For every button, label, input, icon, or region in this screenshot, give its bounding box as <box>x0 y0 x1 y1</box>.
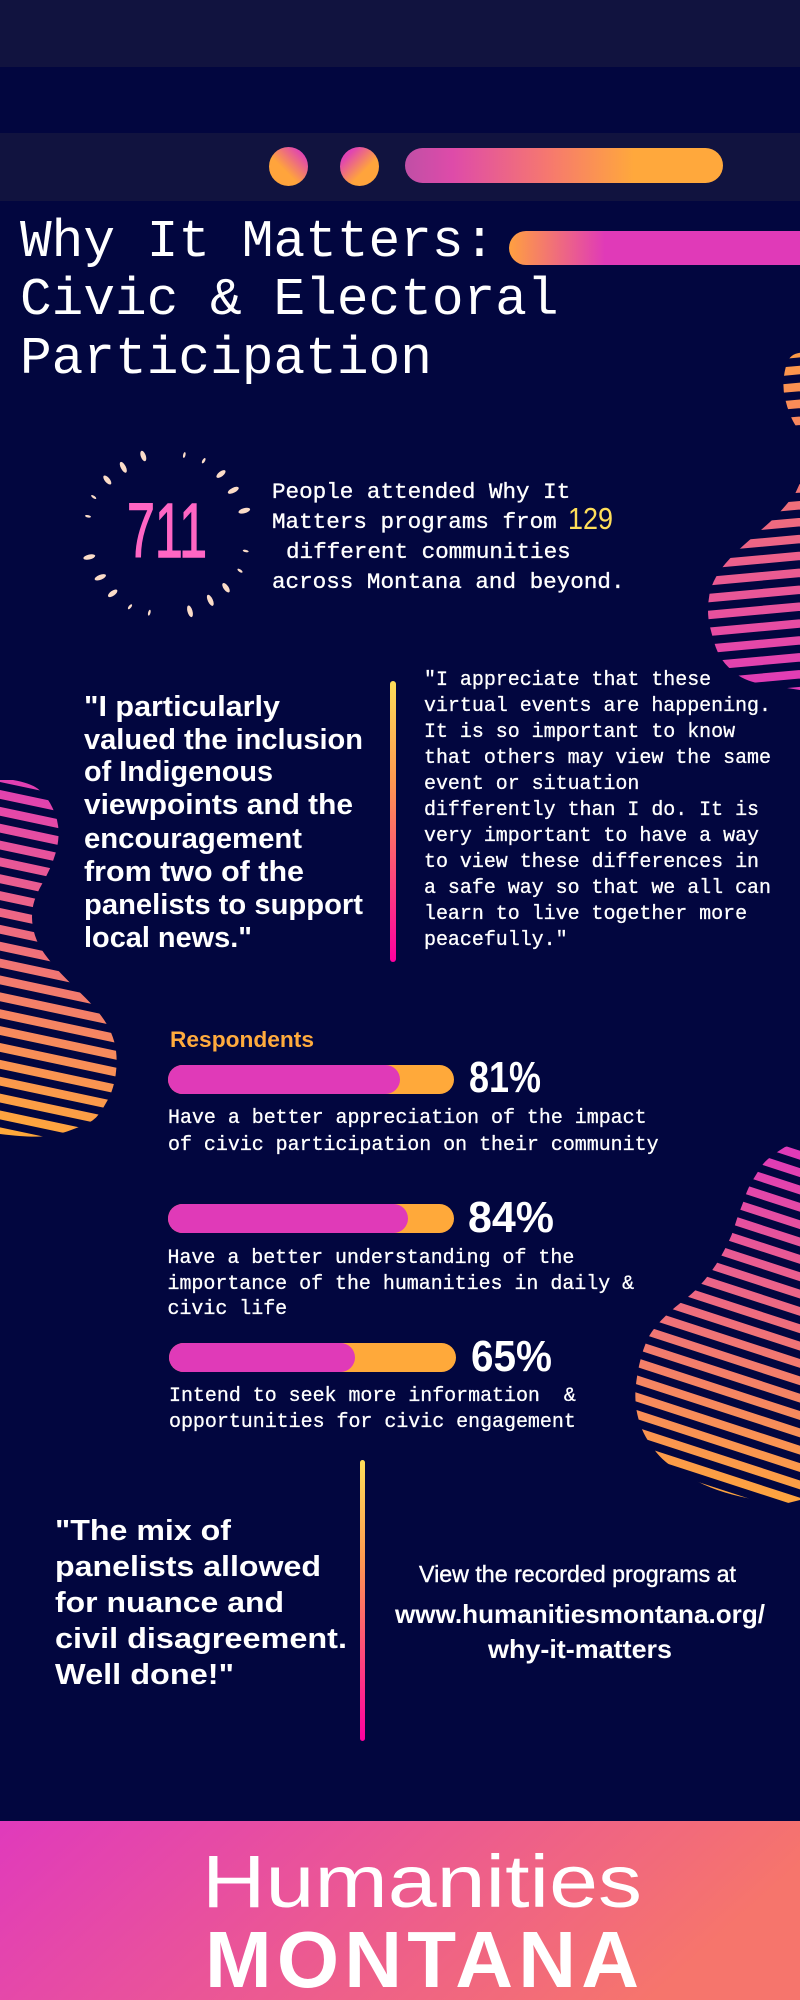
quote: Indigenous viewpoints: valued the inclusion <box>84 724 363 756</box>
description: 65%: Intend to seek more information & <box>169 1384 576 1407</box>
description: 84%: civic life <box>168 1297 287 1320</box>
call to action: recorded programs link: View the recorded programs at <box>419 1561 737 1587</box>
title: Participation <box>20 329 432 389</box>
heading: Respondents: Respondents <box>170 1027 314 1052</box>
quote: virtual events <box>424 668 771 951</box>
bar: 81%: 81% <box>469 1053 541 1102</box>
quote: virtual events: to view these differences in <box>424 850 759 873</box>
quote: virtual events: It is so important to know <box>424 720 735 743</box>
bar: 65%: 65% <box>471 1332 552 1381</box>
call to action: recorded programs link <box>394 1561 765 1664</box>
stat description: People attended Why It <box>272 479 570 505</box>
bar: 84%: 84% <box>468 1193 554 1242</box>
quote: virtual events: learn to live together more <box>424 902 747 925</box>
footer: Humanities Montana logo: Humanities <box>202 1840 642 1923</box>
quote: Indigenous viewpoints: encouragement <box>84 823 302 855</box>
top band <box>0 0 800 67</box>
quote: Indigenous viewpoints: from two of the <box>84 856 304 888</box>
quote: virtual events: that others may view the same <box>424 746 771 769</box>
striped blob: lower right <box>635 1146 800 1503</box>
title: Civic & Electoral <box>20 270 559 330</box>
stat description: Matters programs from <box>272 509 557 535</box>
stat description <box>272 479 625 595</box>
description: 84%: importance of the humanities in daily & <box>168 1272 634 1295</box>
bar: 84% <box>168 1193 554 1242</box>
bar: 81% <box>168 1053 541 1102</box>
quote: mix of panelists: Well done!" <box>55 1659 234 1691</box>
quote: virtual events: peacefully." <box>424 928 568 951</box>
description: 65%: opportunities for civic engagement <box>169 1410 576 1433</box>
quote: virtual events: very important to have a way <box>424 824 759 847</box>
call to action: recorded programs link: why-it-matters <box>487 1634 672 1664</box>
striped blob: left <box>0 780 117 1137</box>
title: Why It Matters: <box>20 212 495 272</box>
quote: Indigenous viewpoints: "I particularly <box>84 691 280 723</box>
quote: Indigenous viewpoints <box>84 691 363 954</box>
call to action: recorded programs link: www.humanitiesmontana.org/ <box>394 1599 765 1629</box>
quote: mix of panelists: civil disagreement. <box>55 1623 347 1655</box>
stat: 711 with radial ticks <box>83 450 251 618</box>
bar: 65% <box>169 1332 552 1381</box>
quote: mix of panelists: for nuance and <box>55 1587 284 1619</box>
quote: virtual events: virtual events are happening. <box>424 694 771 717</box>
divider: first quotes <box>390 681 396 962</box>
description: 84%: Have a better understanding of the <box>168 1246 574 1269</box>
quote: virtual events: "I appreciate that these <box>424 668 711 691</box>
description: 84% <box>168 1246 634 1320</box>
stat: 711 with radial ticks: 711 <box>127 488 207 574</box>
footer: Humanities Montana logo <box>0 1821 800 2000</box>
description: 81% <box>168 1106 659 1156</box>
stat number: 129: 129 <box>568 501 613 536</box>
divider: second quote <box>360 1460 365 1741</box>
title pill <box>509 231 800 265</box>
quote: virtual events: differently than I do. It is <box>424 798 759 821</box>
description: 81%: of civic participation on their community <box>168 1133 659 1156</box>
quote: Indigenous viewpoints: of Indigenous <box>84 756 273 788</box>
quote: Indigenous viewpoints: local news." <box>84 922 252 954</box>
stat description: across Montana and beyond. <box>272 569 625 595</box>
quote: mix of panelists <box>55 1515 347 1691</box>
quote: virtual events: event or situation <box>424 772 639 795</box>
quote: Indigenous viewpoints: panelists to support <box>84 889 363 921</box>
stat description: different communities <box>286 539 571 565</box>
title <box>20 212 559 389</box>
quote: mix of panelists: panelists allowed <box>55 1551 321 1583</box>
description: 65% <box>169 1384 576 1433</box>
quote: Indigenous viewpoints: viewpoints and the <box>84 789 353 821</box>
quote: mix of panelists: "The mix of <box>55 1515 231 1547</box>
description: 81%: Have a better appreciation of the impact <box>168 1106 647 1129</box>
striped blob: top right <box>737 338 772 719</box>
quote: virtual events: a safe way so that we all can <box>424 876 771 899</box>
second band with dots and pill <box>0 133 800 201</box>
